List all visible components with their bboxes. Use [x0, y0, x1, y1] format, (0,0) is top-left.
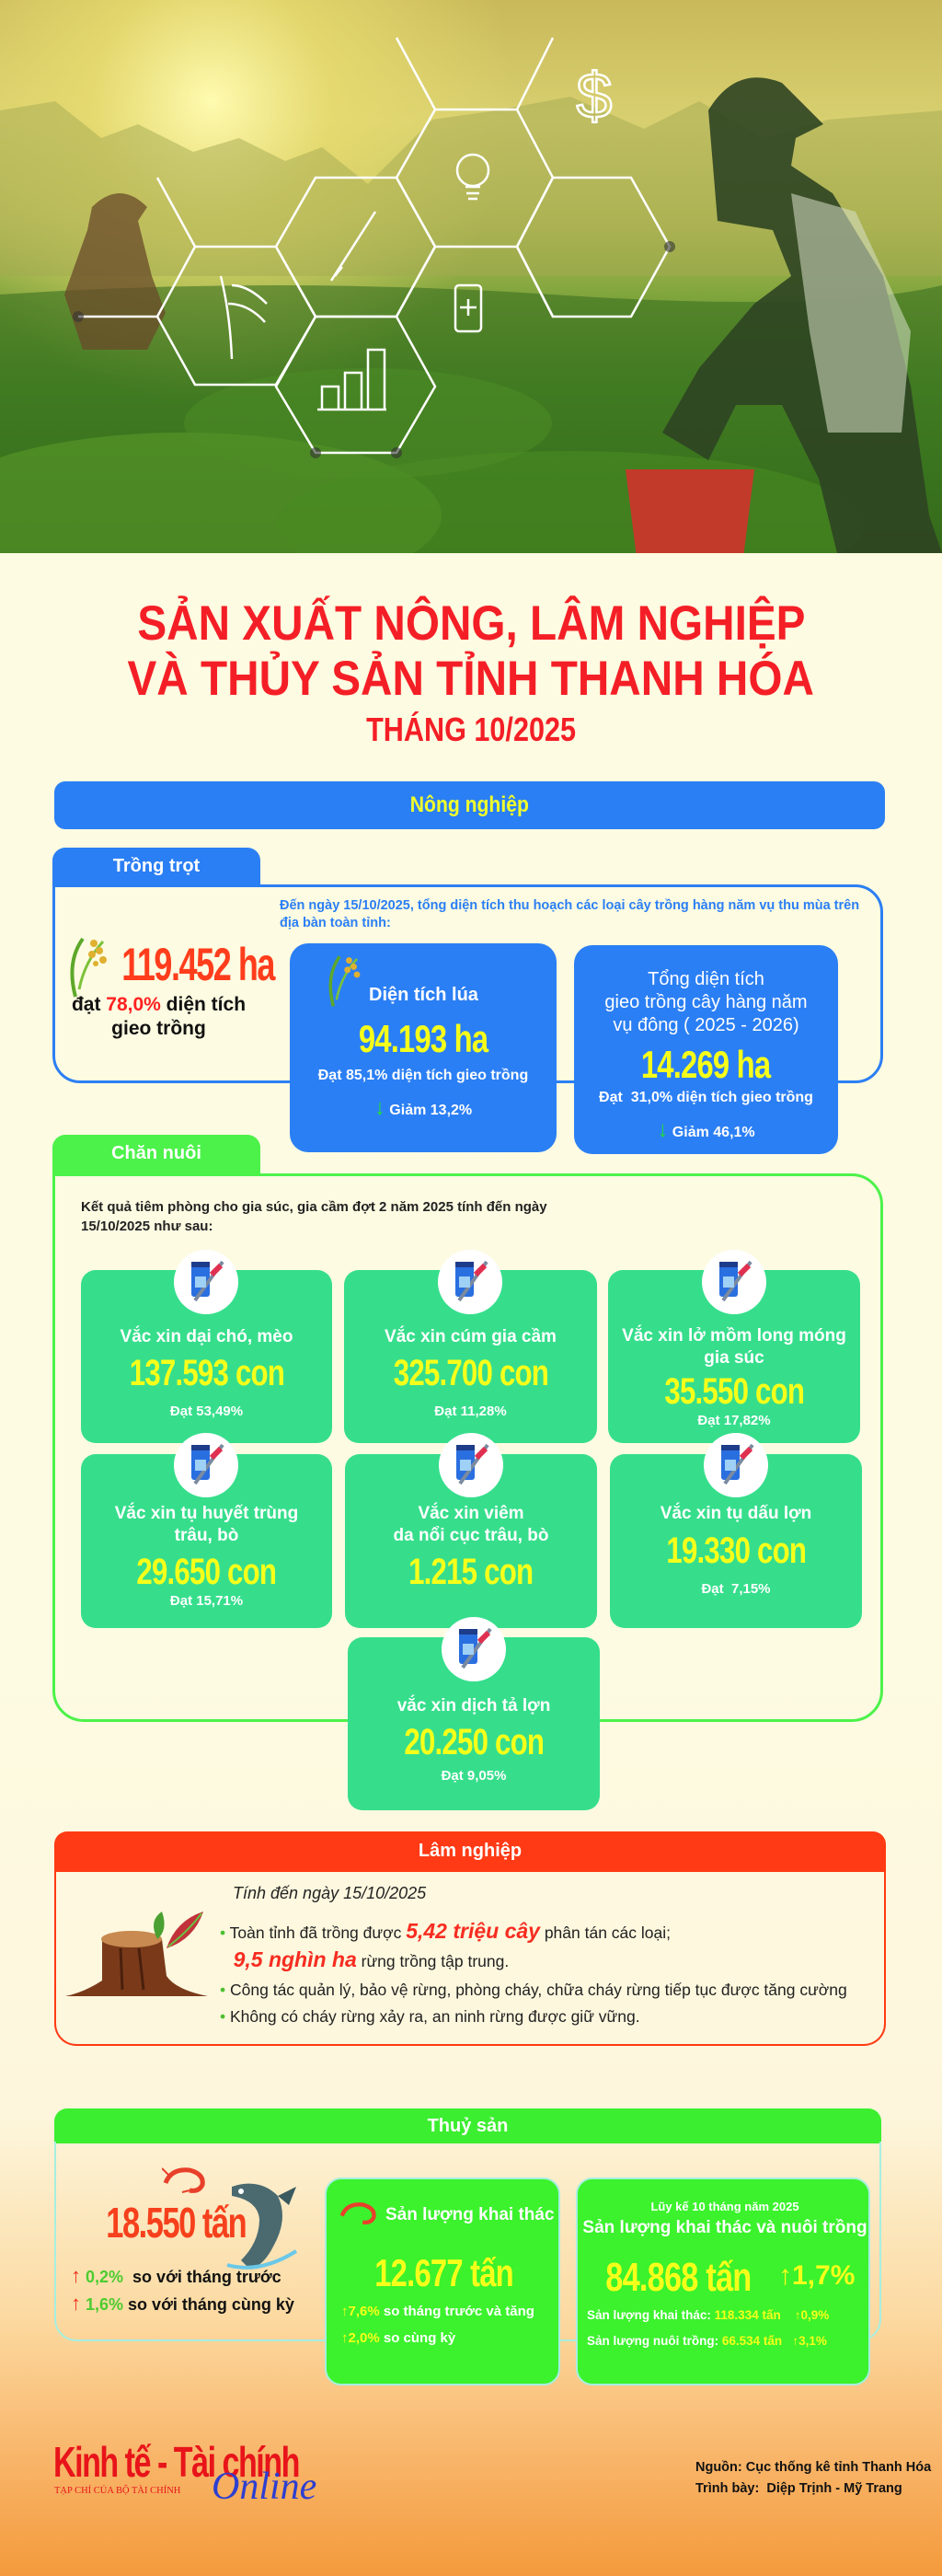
card: lũy kế 10 tháng: Sản lượng khai thác: 118.334 tấn ↑0,9%: [587, 2308, 829, 2322]
box: tổng diện tích vụ đông: Tổng diện tích: [648, 969, 764, 989]
card: viêm da nổi cục: 1.215 con: [408, 1552, 534, 1592]
card: viêm da nổi cục: da nổi cục trâu, bò: [394, 1526, 548, 1545]
heading: Nông nghiệp: [54, 781, 885, 829]
panel: trồng trọt: [52, 884, 883, 1083]
heading: Lâm nghiệp: Lâm nghiệp: [419, 1841, 522, 1861]
box: tổng diện tích vụ đông: Đạt 31,0% diện tích gieo trồng: [599, 1090, 813, 1105]
bullet list: • Toàn tỉnh đã trồng được 5,42 triệu cây phân tán các loại;: [220, 1919, 671, 1943]
box: tổng diện tích vụ đông: [574, 945, 838, 1154]
card: dại chó mèo: Vắc xin dại chó, mèo: [121, 1327, 293, 1346]
card: sản lượng khai thác: 12.677 tấn: [375, 2251, 513, 2294]
card: dịch tả lợn: vắc xin dịch tả lợn: [397, 1696, 550, 1715]
logo: Kinh tế - Tài chính Online: TẠP CHÍ CỦA BỘ TÀI CHÍNH: [54, 2486, 180, 2496]
bullet list: • Công tác quản lý, bảo vệ rừng, phòng cháy, chữa cháy rừng tiếp tục được tăng cường: [220, 1981, 847, 1999]
card: cúm gia cầm: Vắc xin cúm gia cầm: [385, 1327, 557, 1346]
heading: Nông nghiệp: Nông nghiệp: [410, 792, 529, 817]
card: dịch tả lợn: Đạt 9,05%: [442, 1768, 506, 1784]
tab: Trồng trọt: Trồng trọt: [113, 856, 200, 876]
card: lũy kế 10 tháng: Lũy kế 10 tháng năm 2025: [650, 2200, 799, 2213]
tab: Chăn nuôi: [52, 1135, 260, 1175]
tab: Trồng trọt: [52, 848, 260, 886]
box: tổng diện tích vụ đông: gieo trồng cây hàng năm: [604, 992, 808, 1012]
card: lở mồm long móng: gia súc: [704, 1348, 764, 1368]
tab: Chăn nuôi: Chăn nuôi: [111, 1143, 201, 1163]
bullet list: [220, 1919, 847, 2026]
card: viêm da nổi cục: [345, 1454, 597, 1628]
card: cúm gia cầm: 325.700 con: [393, 1353, 548, 1393]
panel: lâm nghiệp: [54, 1870, 886, 2046]
stat: total harvested area: 119.452 ha: [121, 939, 274, 990]
logo: Kinh tế - Tài chính Online: [53, 2438, 316, 2508]
card: lở mồm long móng: 35.550 con: [664, 1371, 804, 1412]
title: SẢN XUẤT NÔNG, LÂM NGHIỆP: [137, 596, 805, 651]
logo: Kinh tế - Tài chính Online: Kinh tế - Tài chính: [53, 2438, 299, 2486]
panel: thuỷ sản: [54, 2142, 881, 2341]
farmer left: [64, 193, 166, 350]
hero photo: [0, 0, 942, 553]
icon: rice: [329, 955, 361, 1007]
card: sản lượng khai thác: [325, 2177, 560, 2385]
box: diện tích lúa: Diện tích lúa: [369, 985, 478, 1005]
hex network: [78, 38, 670, 453]
icons: $: [577, 60, 612, 132]
card: lở mồm long móng: Đạt 17,82%: [697, 1413, 771, 1428]
source credits: [695, 2460, 931, 2496]
card: tụ huyết trùng: trâu, bò: [175, 1526, 238, 1545]
box: tổng diện tích vụ đông: 14.269 ha: [641, 1043, 771, 1086]
title: [127, 595, 814, 748]
card: dại chó mèo: 137.593 con: [129, 1353, 284, 1393]
icons: vaccine circles: [174, 1250, 768, 1681]
heading: Lâm nghiệp: [54, 1831, 886, 1872]
bullet list: • Không có cháy rừng xảy ra, an ninh rừng được giữ vững.: [220, 2007, 640, 2026]
card: cúm gia cầm: Đạt 11,28%: [434, 1404, 507, 1419]
card: tụ huyết trùng: 29.650 con: [137, 1552, 276, 1592]
card: tụ huyết trùng: Vắc xin tụ huyết trùng: [115, 1504, 298, 1523]
card: sản lượng khai thác: Sản lượng khai thác: [385, 2205, 555, 2224]
card: tụ dấu lợn: Vắc xin tụ dấu lợn: [661, 1504, 811, 1523]
card: lũy kế 10 tháng: 84.868 tấn: [605, 2255, 752, 2300]
card: dịch tả lợn: [348, 1637, 600, 1810]
card: sản lượng khai thác: ↑7,6% so tháng trước và tăng: [341, 2304, 534, 2319]
icon: fish: [226, 2183, 297, 2270]
card: lũy kế 10 tháng: Sản lượng nuôi trồng: 66.534 tấn ↑3,1%: [587, 2334, 827, 2348]
panel: chăn nuôi: [52, 1173, 883, 1722]
stat: total harvested area: đạt 78,0% diện tích: [72, 994, 246, 1015]
box: tổng diện tích vụ đông: vụ đông ( 2025 - 2026): [613, 1015, 799, 1035]
card: tụ huyết trùng: [81, 1454, 332, 1628]
stat: total fishery: ↑ 0,2% so với tháng trước: [71, 2264, 281, 2287]
card: sản lượng khai thác: ↑2,0% so cùng kỳ: [341, 2330, 455, 2346]
intro text: trồng trọt: Đến ngày 15/10/2025, tổng diện tích thu hoạch các loại cây trồng hàng năm vụ thu mùa trên địa bàn toàn tỉnh:: [280, 898, 859, 930]
box: tổng diện tích vụ đông: ↓ Giảm 46,1%: [657, 1117, 755, 1142]
card: tụ dấu lợn: 19.330 con: [666, 1531, 806, 1571]
stat: total harvested area: [70, 937, 276, 1039]
box: diện tích lúa: ↓ Giảm 13,2%: [374, 1095, 472, 1120]
card: tụ dấu lợn: Đạt 7,15%: [701, 1581, 771, 1597]
title: VÀ THỦY SẢN TỈNH THANH HÓA: [128, 652, 814, 706]
farmer right: [662, 77, 942, 553]
icon: tree stump: [65, 1912, 208, 1996]
stat: total harvested area: gieo trồng: [111, 1018, 206, 1039]
card: dịch tả lợn: 20.250 con: [404, 1722, 544, 1762]
card: cúm gia cầm: [344, 1270, 597, 1443]
box: diện tích lúa: [290, 943, 557, 1152]
card: tụ huyết trùng: Đạt 15,71%: [170, 1593, 243, 1609]
card: dại chó mèo: Đạt 53,49%: [170, 1404, 243, 1419]
card: lũy kế 10 tháng: Sản lượng khai thác và nuôi trồng: [582, 2218, 867, 2237]
heading: Thuỷ sản: [54, 2108, 881, 2143]
title: THÁNG 10/2025: [366, 710, 576, 748]
heading: Thuỷ sản: Thuỷ sản: [428, 2116, 508, 2136]
source credits: Nguồn: Cục thống kê tỉnh Thanh Hóa: [695, 2460, 931, 2475]
box: diện tích lúa: 94.193 ha: [359, 1017, 488, 1060]
text: date: Tính đến ngày 15/10/2025: [233, 1884, 426, 1902]
bullet list: 9,5 nghìn ha rừng trồng tập trung.: [234, 1947, 509, 1971]
card: viêm da nổi cục: Vắc xin viêm: [418, 1504, 524, 1523]
logo: Kinh tế - Tài chính Online: Online: [212, 2466, 316, 2508]
intro text: chăn nuôi: Kết quả tiêm phòng cho gia súc, gia cầm đợt 2 năm 2025 tính đến ngày 15/10/2025 như sau:: [81, 1199, 547, 1234]
stat: total fishery: ↑ 1,6% so với tháng cùng kỳ: [71, 2292, 294, 2315]
card: lũy kế 10 tháng: ↑1,7%: [778, 2260, 855, 2291]
card: lở mồm long móng: Vắc xin lở mồm long móng: [622, 1326, 846, 1346]
card: lũy kế 10 tháng: [576, 2177, 870, 2385]
icons: [221, 60, 612, 410]
box: diện tích lúa: Đạt 85,1% diện tích gieo trồng: [318, 1068, 528, 1083]
icon: shrimp: [162, 2167, 205, 2193]
card: lở mồm long móng: [608, 1270, 860, 1443]
source credits: Trình bày: Diệp Trịnh - Mỹ Trang: [695, 2481, 902, 2496]
stat: total fishery: [71, 2167, 297, 2315]
stat: total fishery: 18.550 tấn: [106, 2199, 246, 2247]
card: tụ dấu lợn: [610, 1454, 862, 1628]
card: dại chó mèo: [81, 1270, 332, 1443]
